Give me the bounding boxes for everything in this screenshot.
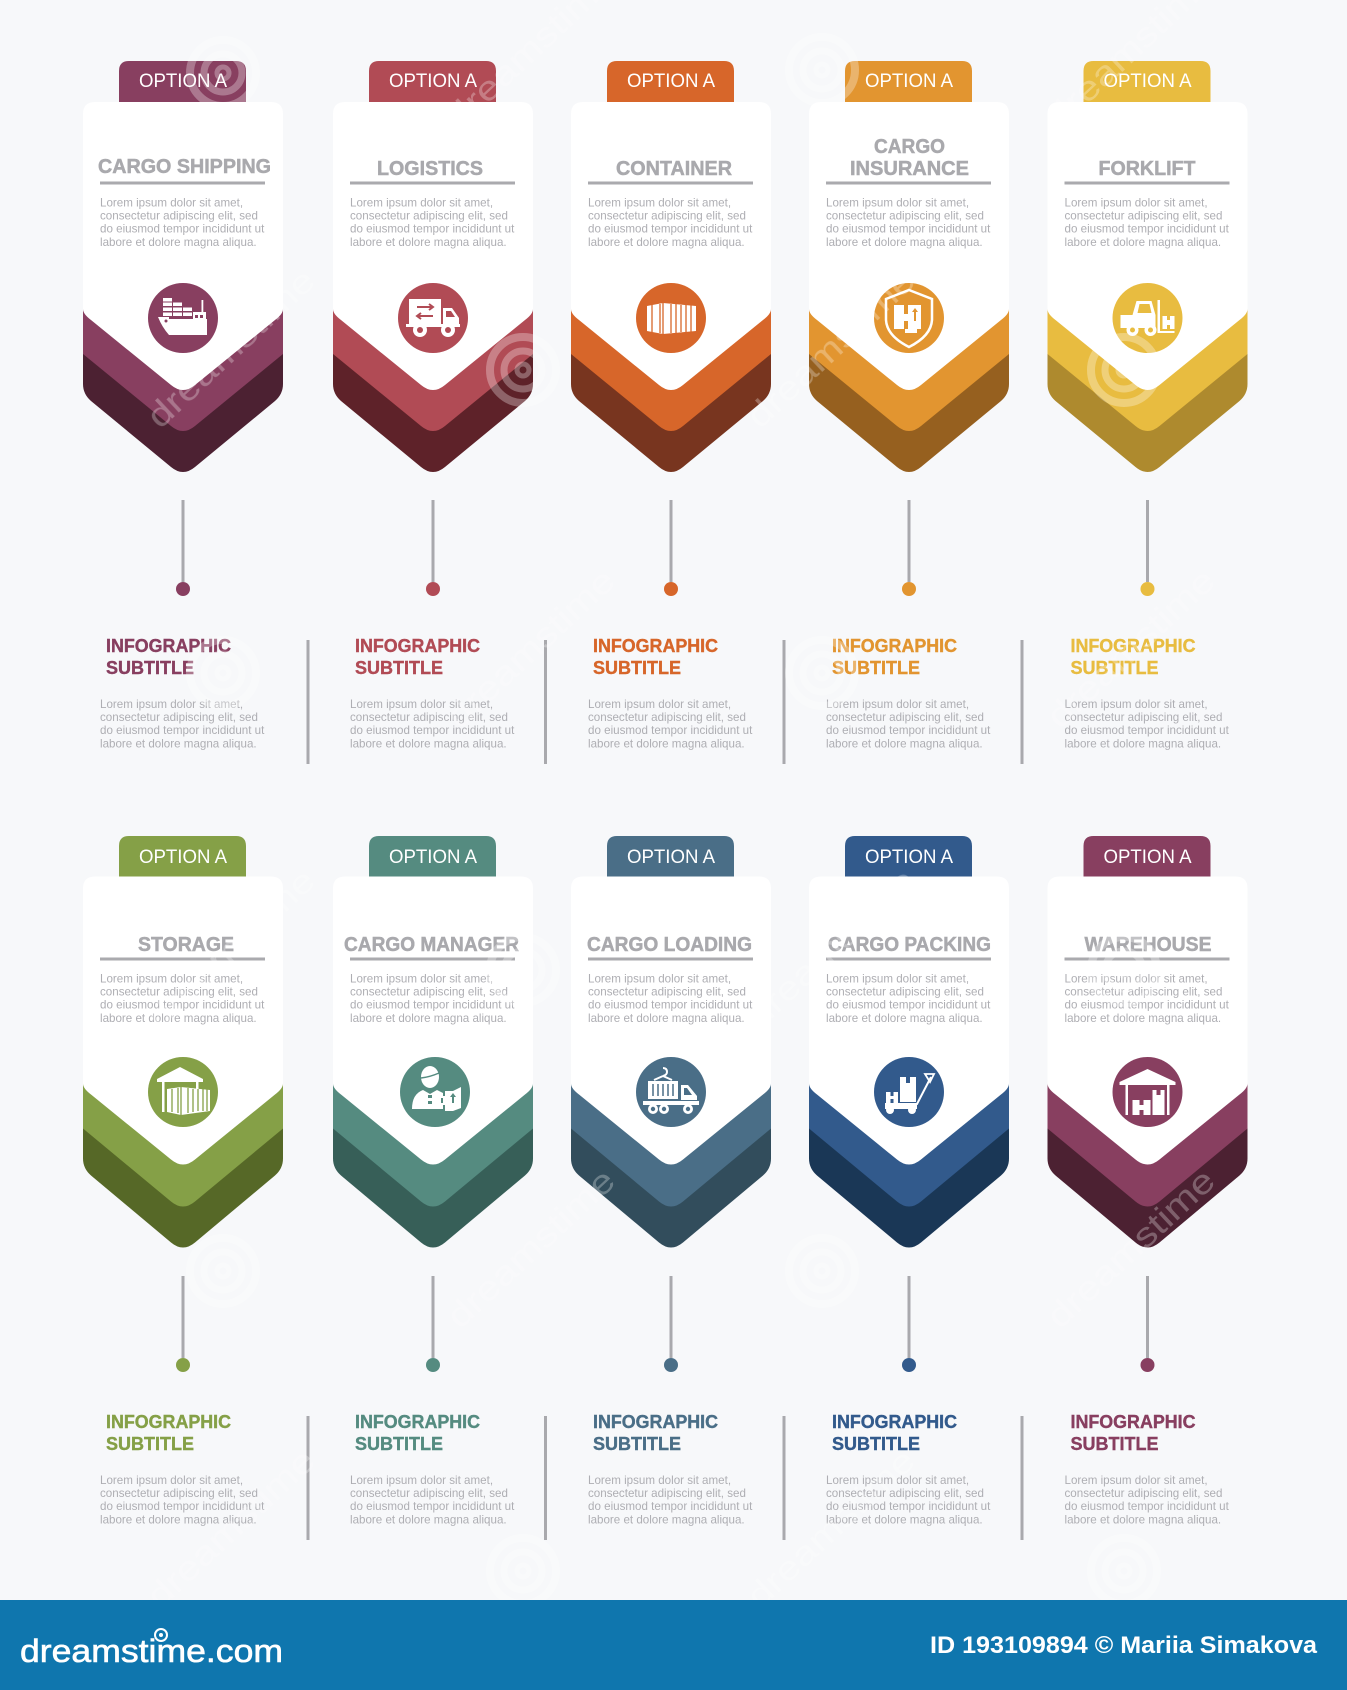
heading: LOGISTICS [377,158,483,180]
subtitle: INFOGRAPHIC [593,636,718,656]
tab: option a: OPTION A [865,846,953,868]
lower body text: Lorem ipsum dolor sit amet, [1064,1474,1208,1487]
chevron card [809,102,1009,472]
subtitle: SUBTITLE [106,1434,194,1454]
tab: option a: OPTION A [139,846,227,868]
connector with dot [176,1276,190,1372]
lower body text: consectetur adipiscing elit, sed [1064,711,1222,724]
card body text: consectetur adipiscing elit, sed [100,986,258,999]
icon: forklift [1112,283,1182,353]
watermark layer: dreamstime [1040,561,1223,736]
connector with dot [1140,500,1154,596]
tab: option a [369,61,496,103]
card body text: Lorem ipsum dolor sit amet, [350,196,493,210]
card body text: labore et dolore magna aliqua. [1064,1012,1221,1025]
card body text: Lorem ipsum dolor sit amet, [1064,196,1208,210]
card body text: Lorem ipsum dolor sit amet, [100,972,243,986]
subtitle: INFOGRAPHIC [593,1412,718,1432]
tab: option a: OPTION A [627,846,715,868]
lower body text: consectetur adipiscing elit, sed [100,711,258,724]
watermark layer: dreamstime [740,861,923,1036]
tab: option a [845,61,972,103]
tab: option a: OPTION A [865,70,953,92]
card body text: labore et dolore magna aliqua. [826,1012,983,1025]
tab: option a: OPTION A [1104,70,1192,92]
subtitle: SUBTITLE [593,658,681,678]
subtitle: SUBTITLE [832,658,920,678]
lower body text: do eiusmod tempor incididunt ut [100,724,265,737]
lower body text: labore et dolore magna aliqua. [350,1513,507,1526]
connector with dot [1140,1276,1154,1372]
card body text: consectetur adipiscing elit, sed [100,210,258,223]
chevron card [1048,102,1248,472]
connector with dot [664,1276,678,1372]
card body text: Lorem ipsum dolor sit amet, [350,972,493,986]
watermark layer: dreamstime [140,261,323,436]
icon: delivery truck [398,283,468,353]
icon: cargo ship [148,283,218,353]
watermark layer: dreamstime [1040,1161,1223,1336]
tab: option a [119,836,246,878]
lower body text: do eiusmod tempor incididunt ut [350,1500,515,1513]
card body text: labore et dolore magna aliqua. [350,236,507,249]
card body text: do eiusmod tempor incididunt ut [588,999,753,1012]
watermark layer [140,0,1223,1616]
card body text: labore et dolore magna aliqua. [588,1012,745,1025]
card body text: do eiusmod tempor incididunt ut [350,999,515,1012]
logo: dreamstime.com: dreamstime.com [20,1633,283,1669]
panel: cargo loading [571,836,771,1526]
chevron card [1048,876,1248,1248]
lower body text: labore et dolore magna aliqua. [100,1513,257,1526]
subtitle: SUBTITLE [106,658,194,678]
subtitle: INFOGRAPHIC [832,636,957,656]
tab: option a: OPTION A [139,70,227,92]
heading: STORAGE [138,934,234,956]
heading: CARGO LOADING [587,934,752,956]
card body text: consectetur adipiscing elit, sed [826,210,984,223]
heading: FORKLIFT [1098,158,1196,180]
card body text: do eiusmod tempor incididunt ut [826,999,991,1012]
subtitle: INFOGRAPHIC [355,636,480,656]
card body text: labore et dolore magna aliqua. [100,236,257,249]
tab: option a [607,61,734,103]
heading: CONTAINER [616,158,733,180]
card body text: do eiusmod tempor incididunt ut [826,223,991,236]
lower body text: do eiusmod tempor incididunt ut [1064,724,1230,737]
card body text: Lorem ipsum dolor sit amet, [1064,972,1208,986]
subtitle: SUBTITLE [355,658,443,678]
panel: forklift [1048,61,1248,750]
lower body text: consectetur adipiscing elit, sed [588,711,746,724]
card body text: consectetur adipiscing elit, sed [350,986,508,999]
watermark layer: dreamstime [740,1441,923,1616]
lower body text: labore et dolore magna aliqua. [826,1513,983,1526]
watermark layer: dreamstime [440,1161,623,1336]
lower body text: Lorem ipsum dolor sit amet, [826,1474,969,1487]
icon: insurance shield [874,283,944,353]
card body text: consectetur adipiscing elit, sed [588,210,746,223]
watermark layer: dreamstime [140,861,323,1036]
lower body text: Lorem ipsum dolor sit amet, [100,1474,243,1487]
heading: CARGO PACKING [828,934,991,956]
card body text: do eiusmod tempor incididunt ut [100,999,265,1012]
connector with dot [902,500,916,596]
footer bar [0,1600,1347,1690]
connector with dot [426,1276,440,1372]
card body text: consectetur adipiscing elit, sed [826,986,984,999]
tab: option a [119,61,246,103]
card body text: Lorem ipsum dolor sit amet, [100,196,243,210]
lower body text: Lorem ipsum dolor sit amet, [350,698,493,711]
chevron card [83,102,283,472]
subtitle: SUBTITLE [1070,1434,1158,1454]
icon: warehouse with boxes [1112,1057,1182,1127]
lower body text: labore et dolore magna aliqua. [826,737,983,750]
subtitle: INFOGRAPHIC [1070,636,1196,656]
tab: option a [845,836,972,878]
chevron card [83,876,283,1248]
icon: cargo manager with box [400,1057,470,1127]
lower body text: labore et dolore magna aliqua. [350,737,507,750]
lower body text: Lorem ipsum dolor sit amet, [100,698,243,711]
card body text: Lorem ipsum dolor sit amet, [826,972,969,986]
subtitle: SUBTITLE [1070,658,1158,678]
card body text: consectetur adipiscing elit, sed [588,986,746,999]
card body text: consectetur adipiscing elit, sed [1064,986,1222,999]
subtitle: SUBTITLE [355,1434,443,1454]
lower body text: do eiusmod tempor incididunt ut [350,724,515,737]
icon: truck being loaded by crane [636,1057,706,1127]
connector with dot [176,500,190,596]
card body text: do eiusmod tempor incididunt ut [350,223,515,236]
lower body text: do eiusmod tempor incididunt ut [588,724,753,737]
chevron card [571,102,771,472]
card body text: labore et dolore magna aliqua. [100,1012,257,1025]
subtitle: INFOGRAPHIC [106,1412,231,1432]
card body text: labore et dolore magna aliqua. [350,1012,507,1025]
card body text: labore et dolore magna aliqua. [826,236,983,249]
lower body text: Lorem ipsum dolor sit amet, [826,698,969,711]
panel: cargo packing [809,836,1009,1526]
chevron card [333,102,533,472]
card body text: consectetur adipiscing elit, sed [1064,210,1222,223]
card body text: do eiusmod tempor incididunt ut [100,223,265,236]
image id and author: ID 193109894 © Mariia Simakova [930,1632,1318,1659]
lower body text: labore et dolore magna aliqua. [1064,737,1221,750]
lower body text: do eiusmod tempor incididunt ut [100,1500,265,1513]
lower body text: Lorem ipsum dolor sit amet, [588,1474,731,1487]
lower body text: do eiusmod tempor incididunt ut [1064,1500,1230,1513]
card body text: Lorem ipsum dolor sit amet, [588,196,731,210]
tab: option a: OPTION A [389,846,477,868]
chevron card [809,876,1009,1248]
lower body text: labore et dolore magna aliqua. [588,1513,745,1526]
card body text: labore et dolore magna aliqua. [588,236,745,249]
lower body text: consectetur adipiscing elit, sed [588,1487,746,1500]
subtitle: INFOGRAPHIC [106,636,231,656]
subtitle: SUBTITLE [593,1434,681,1454]
tab: option a [607,836,734,878]
lower body text: labore et dolore magna aliqua. [100,737,257,750]
lower body text: do eiusmod tempor incididunt ut [826,724,991,737]
tab: option a: OPTION A [627,70,715,92]
subtitle: INFOGRAPHIC [355,1412,480,1432]
lower body text: consectetur adipiscing elit, sed [1064,1487,1222,1500]
subtitle: INFOGRAPHIC [1070,1412,1196,1432]
watermark layer: dreamstime [740,261,923,436]
panel: container [571,61,771,750]
subtitle: INFOGRAPHIC [832,1412,957,1432]
tab: option a [1084,61,1210,103]
icon: shipping container [636,283,706,353]
subtitle: SUBTITLE [832,1434,920,1454]
lower body text: consectetur adipiscing elit, sed [350,711,508,724]
chevron card [333,876,533,1248]
card body text: consectetur adipiscing elit, sed [350,210,508,223]
lower body text: consectetur adipiscing elit, sed [350,1487,508,1500]
chevron card [571,876,771,1248]
panel: cargo insurance [809,61,1009,750]
lower body text: consectetur adipiscing elit, sed [100,1487,258,1500]
card body text: Lorem ipsum dolor sit amet, [826,196,969,210]
watermark layer: dreamstime [140,1441,323,1616]
tab: option a: OPTION A [1104,846,1192,868]
card body text: do eiusmod tempor incididunt ut [588,223,753,236]
lower body text: do eiusmod tempor incididunt ut [826,1500,991,1513]
tab: option a: OPTION A [389,70,477,92]
card body text: do eiusmod tempor incididunt ut [1064,223,1230,236]
lower body text: Lorem ipsum dolor sit amet, [1064,698,1208,711]
lower body text: labore et dolore magna aliqua. [1064,1513,1221,1526]
tab: option a [369,836,496,878]
card body text: labore et dolore magna aliqua. [1064,236,1221,249]
panel: warehouse [1048,836,1248,1526]
connector with dot [902,1276,916,1372]
lower body text: do eiusmod tempor incididunt ut [588,1500,753,1513]
heading: INSURANCE [850,158,969,180]
panel: cargo manager [333,836,533,1526]
heading: CARGO SHIPPING [98,156,271,178]
heading: CARGO MANAGER [344,934,520,956]
tab: option a [1084,836,1210,878]
connector with dot [664,500,678,596]
panel: logistics [333,61,533,750]
icon: storage shed with container [148,1057,218,1127]
lower body text: consectetur adipiscing elit, sed [826,711,984,724]
watermark layer: dreamstime [440,561,623,736]
panel: cargo shipping [83,61,283,750]
icon: hand cart with boxes [874,1057,944,1127]
lower body text: labore et dolore magna aliqua. [588,737,745,750]
lower body text: Lorem ipsum dolor sit amet, [350,1474,493,1487]
lower body text: consectetur adipiscing elit, sed [826,1487,984,1500]
connector with dot [426,500,440,596]
card body text: do eiusmod tempor incididunt ut [1064,999,1230,1012]
panel: storage [83,836,283,1526]
heading: WAREHOUSE [1084,934,1212,956]
card body text: Lorem ipsum dolor sit amet, [588,972,731,986]
lower body text: Lorem ipsum dolor sit amet, [588,698,731,711]
heading: CARGO [874,136,945,158]
